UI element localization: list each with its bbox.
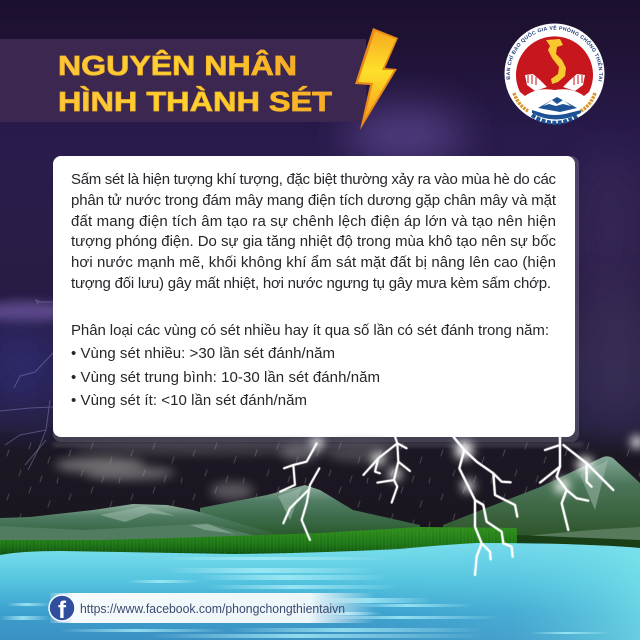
icon: facebook: [49, 595, 75, 624]
title band: [0, 39, 366, 122]
title: NGUYÊN NHÂN: [58, 50, 297, 81]
paragraph: classification: Phân loại các vùng có sét nhiều hay ít qua số lần có sét đánh trong năm:: [71, 322, 549, 339]
paragraph: explanation: tượng phóng điện. Do sự gia tăng nhiệt độ trong mùa khô tạo nên sự bốc: [71, 233, 556, 250]
storm clouds: [53, 442, 583, 500]
paragraph: explanation: hơi nước mạnh mẽ, khối không khí ẩm sát mặt đất bị nâng lên cao (hiện: [71, 254, 556, 271]
paragraph: classification: [71, 322, 549, 409]
title: [58, 50, 332, 117]
bolt: left centre: [363, 437, 410, 503]
grass: [0, 527, 640, 555]
paragraph: explanation: phân tử nước trong đám mây mang điện tích dương gặp chân mây và mặt: [71, 192, 557, 209]
paragraph: classification: • Vùng sét ít: <10 lần sét đánh/năm: [71, 392, 307, 409]
paragraph: explanation: tượng đối lưu) gây mất nhiệt, hơi nước ngưng tụ gây mưa kèm sấm chớp.: [71, 275, 551, 292]
paragraph: classification: • Vùng sét nhiều: >30 lần sét đánh/năm: [71, 345, 335, 362]
facebook link bar: [49, 593, 375, 624]
bolt: right: [540, 437, 613, 530]
url text: https://www.facebook.com/phongchongthientaivn: [80, 602, 345, 616]
bolt: centre: [453, 437, 517, 575]
lightning strikes: [280, 436, 640, 575]
paragraph: explanation: Sấm sét là hiện tượng khí tượng, đặc biệt thường xảy ra vào mùa hè do các: [71, 171, 556, 188]
icon: lightning bolt: [355, 28, 398, 130]
mountains: [0, 456, 640, 549]
lake: [0, 543, 640, 640]
logo: BAN CHỈ ĐẠO QUỐC GIA VỀ PHÒNG CHỐNG THIÊN TAI: [506, 25, 603, 82]
water streaks: [0, 557, 612, 638]
text panel: [53, 156, 579, 442]
rain: [0, 440, 640, 535]
paragraph: explanation: đất mang điện tích âm tạo ra sự chênh lệch điện áp lớn và tạo nên hiện: [71, 213, 556, 230]
paragraph: classification: • Vùng sét trung bình: 10-30 lần sét đánh/năm: [71, 369, 380, 386]
title: HÌNH THÀNH SÉT: [58, 86, 332, 117]
faint lightning on left: [0, 300, 53, 470]
icon: facebook: f: [58, 597, 67, 624]
paragraph: explanation: [71, 171, 557, 292]
bolt: left: [280, 443, 319, 540]
lightning glow: [311, 436, 640, 493]
logo: [504, 24, 604, 125]
